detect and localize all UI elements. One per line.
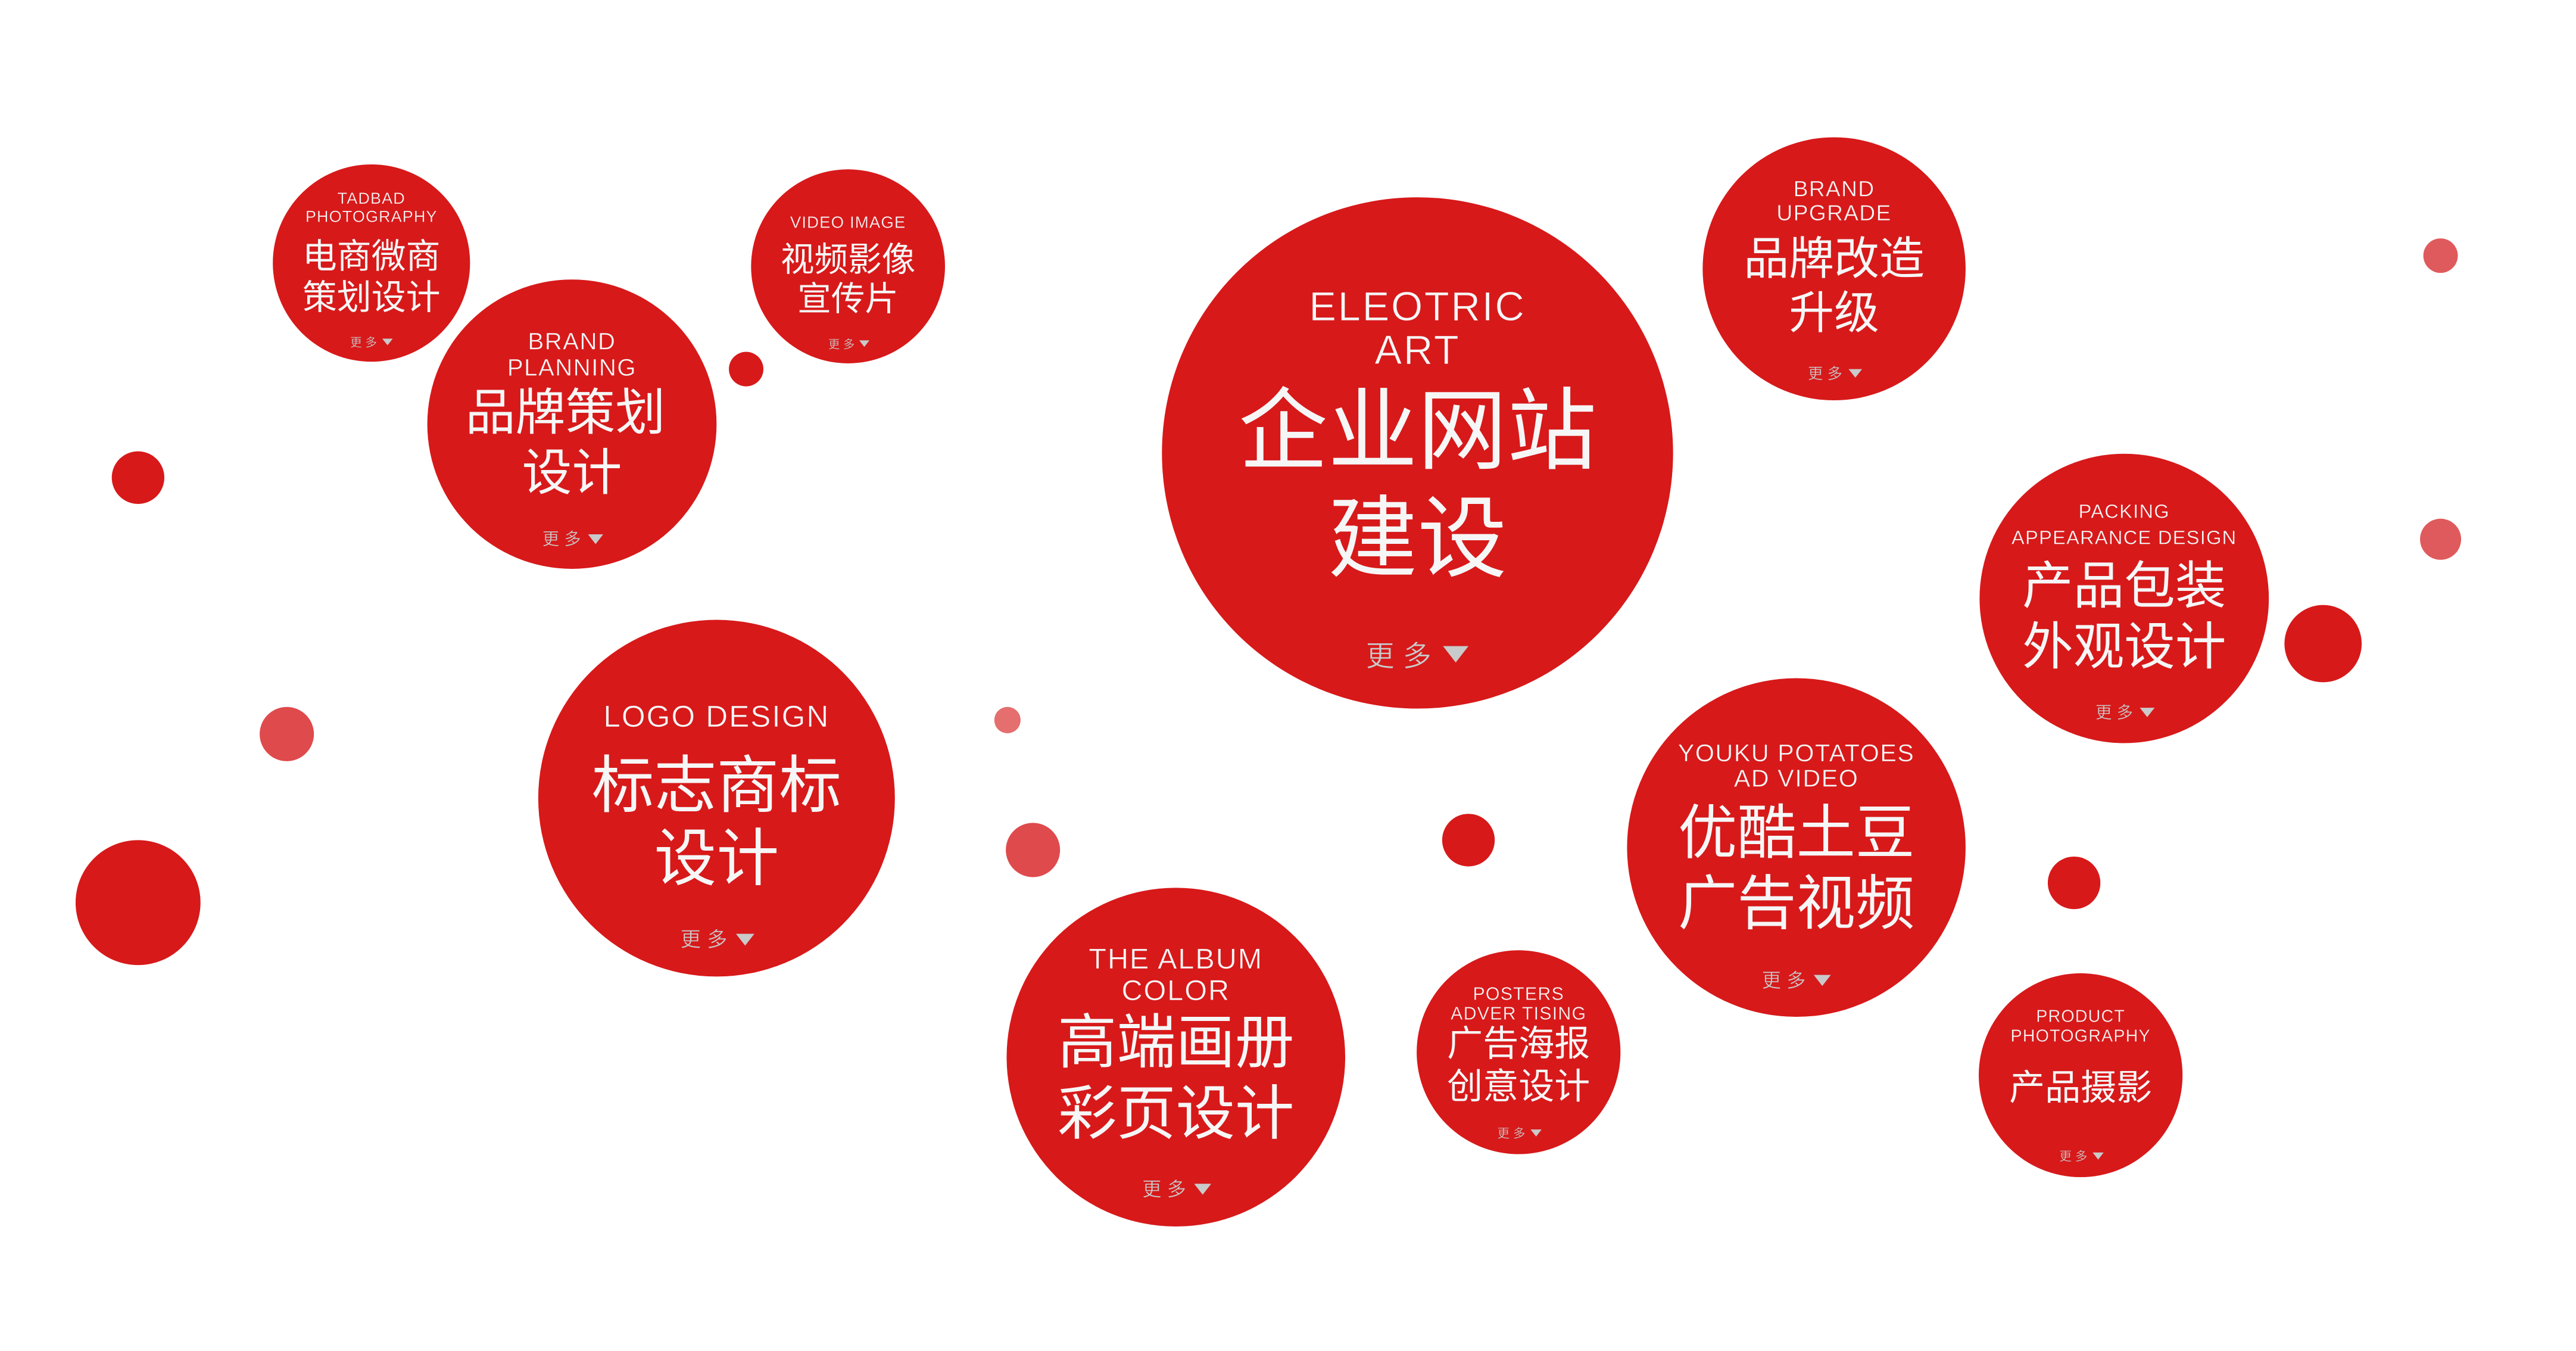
chinese heading: 高端画册 xyxy=(1058,1010,1294,1076)
chinese heading: 品牌改造 xyxy=(1744,234,1925,284)
bubble background xyxy=(1702,137,1966,400)
chinese heading: 策划设计 xyxy=(302,279,441,317)
bubble background xyxy=(1006,888,1345,1227)
english heading: VIDEO IMAGE xyxy=(790,213,906,232)
decorative dots xyxy=(76,238,2461,965)
bubble: packing appearance design xyxy=(1979,454,2269,743)
chinese heading: 产品包装 xyxy=(2022,558,2226,615)
more link: 更多 xyxy=(2059,1150,2091,1163)
chinese heading: 升级 xyxy=(1789,288,1879,338)
chinese heading xyxy=(1239,381,1596,589)
more link: 更多 xyxy=(1366,640,1440,673)
chinese heading: 广告视频 xyxy=(1678,871,1914,937)
english heading: COLOR xyxy=(1122,975,1230,1007)
more link: 更多 xyxy=(2095,703,2138,722)
english heading: LOGO DESIGN xyxy=(603,699,829,733)
more link: 更多 xyxy=(1497,1126,1529,1140)
chinese heading xyxy=(1678,800,1914,937)
english heading: AD VIDEO xyxy=(1734,764,1858,792)
chinese heading xyxy=(1447,1024,1590,1107)
chinese heading xyxy=(466,384,665,500)
chinese heading: 企业网站 xyxy=(1239,381,1596,481)
chinese heading xyxy=(2022,558,2226,676)
bubble background xyxy=(538,620,895,976)
chinese heading: 宣传片 xyxy=(797,280,899,317)
more link: 更多 xyxy=(828,338,858,351)
english heading: APPEARANCE DESIGN xyxy=(2011,527,2237,549)
chinese heading: 标志商标 xyxy=(592,751,841,821)
more link xyxy=(828,338,869,351)
chinese heading: 建设 xyxy=(1328,488,1507,589)
english heading: TADBAD xyxy=(338,189,406,207)
chinese heading: 创意设计 xyxy=(1447,1067,1590,1107)
english heading: THE ALBUM xyxy=(1089,943,1263,975)
chinese heading xyxy=(1058,1010,1294,1147)
bubble: logo design xyxy=(538,620,895,976)
bubble background xyxy=(1627,678,1966,1017)
chinese heading: 电商微商 xyxy=(302,238,441,276)
bubble: electric art / website xyxy=(1162,197,1673,709)
english heading xyxy=(2011,500,2237,549)
english heading: BRAND xyxy=(1794,176,1875,201)
english heading xyxy=(1089,943,1263,1007)
chinese heading xyxy=(302,238,441,317)
english heading: UPGRADE xyxy=(1777,201,1892,225)
more link: 更多 xyxy=(542,530,586,549)
english heading: PACKING xyxy=(2079,500,2170,522)
chinese heading: 品牌策划 xyxy=(466,384,665,440)
bubble background xyxy=(1979,973,2182,1177)
english heading xyxy=(1678,739,1914,792)
chinese heading: 彩页设计 xyxy=(1058,1081,1294,1147)
more link: 更多 xyxy=(1762,970,1811,991)
english heading: POSTERS xyxy=(1473,985,1564,1004)
bubble: brand planning xyxy=(428,279,716,569)
bubble: product photography xyxy=(1979,973,2182,1177)
english heading: ELEOTRIC xyxy=(1309,284,1526,329)
bubble background xyxy=(273,164,470,362)
english heading xyxy=(1309,284,1526,373)
english heading xyxy=(2010,1007,2151,1046)
bubble background xyxy=(751,169,945,363)
chinese heading: 外观设计 xyxy=(2022,619,2226,676)
bubble: brand upgrade xyxy=(1702,137,1966,400)
more link: 更多 xyxy=(1142,1179,1192,1200)
chinese heading: 设计 xyxy=(522,444,622,500)
bubble: tadbad photography xyxy=(273,164,470,362)
bubble: posters advertising xyxy=(1417,950,1620,1154)
english heading: PHOTOGRAPHY xyxy=(305,208,438,226)
english heading xyxy=(1451,985,1586,1024)
more link: 更多 xyxy=(1808,366,1847,382)
english heading: PHOTOGRAPHY xyxy=(2010,1027,2151,1046)
english heading: ART xyxy=(1375,327,1460,373)
english heading: PLANNING xyxy=(507,355,637,381)
chinese heading: 广告海报 xyxy=(1447,1024,1590,1064)
bubble: the album color xyxy=(1006,888,1345,1227)
english heading xyxy=(507,329,637,381)
more link: 更多 xyxy=(681,929,733,951)
english heading: PRODUCT xyxy=(2036,1007,2125,1026)
english heading: BRAND xyxy=(528,329,616,355)
chinese heading: 优酷土豆 xyxy=(1678,800,1914,866)
english heading xyxy=(1777,176,1892,225)
more link: 更多 xyxy=(350,337,381,350)
chinese heading: 产品摄影 xyxy=(2009,1067,2152,1107)
chinese heading xyxy=(592,751,841,894)
chinese heading: 设计 xyxy=(654,824,779,894)
english heading: YOUKU POTATOES xyxy=(1678,739,1914,767)
english heading: ADVER TISING xyxy=(1451,1004,1586,1024)
chinese heading: 视频影像 xyxy=(781,241,915,278)
english heading xyxy=(305,189,438,226)
chinese heading xyxy=(781,241,915,317)
bubble background xyxy=(1162,197,1673,709)
bubble: youku potatoes ad video xyxy=(1627,678,1966,1017)
bubble background xyxy=(428,279,716,569)
bubble background xyxy=(1979,454,2269,743)
bubble background xyxy=(1417,950,1620,1154)
chinese heading xyxy=(1744,234,1925,338)
bubble: video image xyxy=(751,169,945,363)
